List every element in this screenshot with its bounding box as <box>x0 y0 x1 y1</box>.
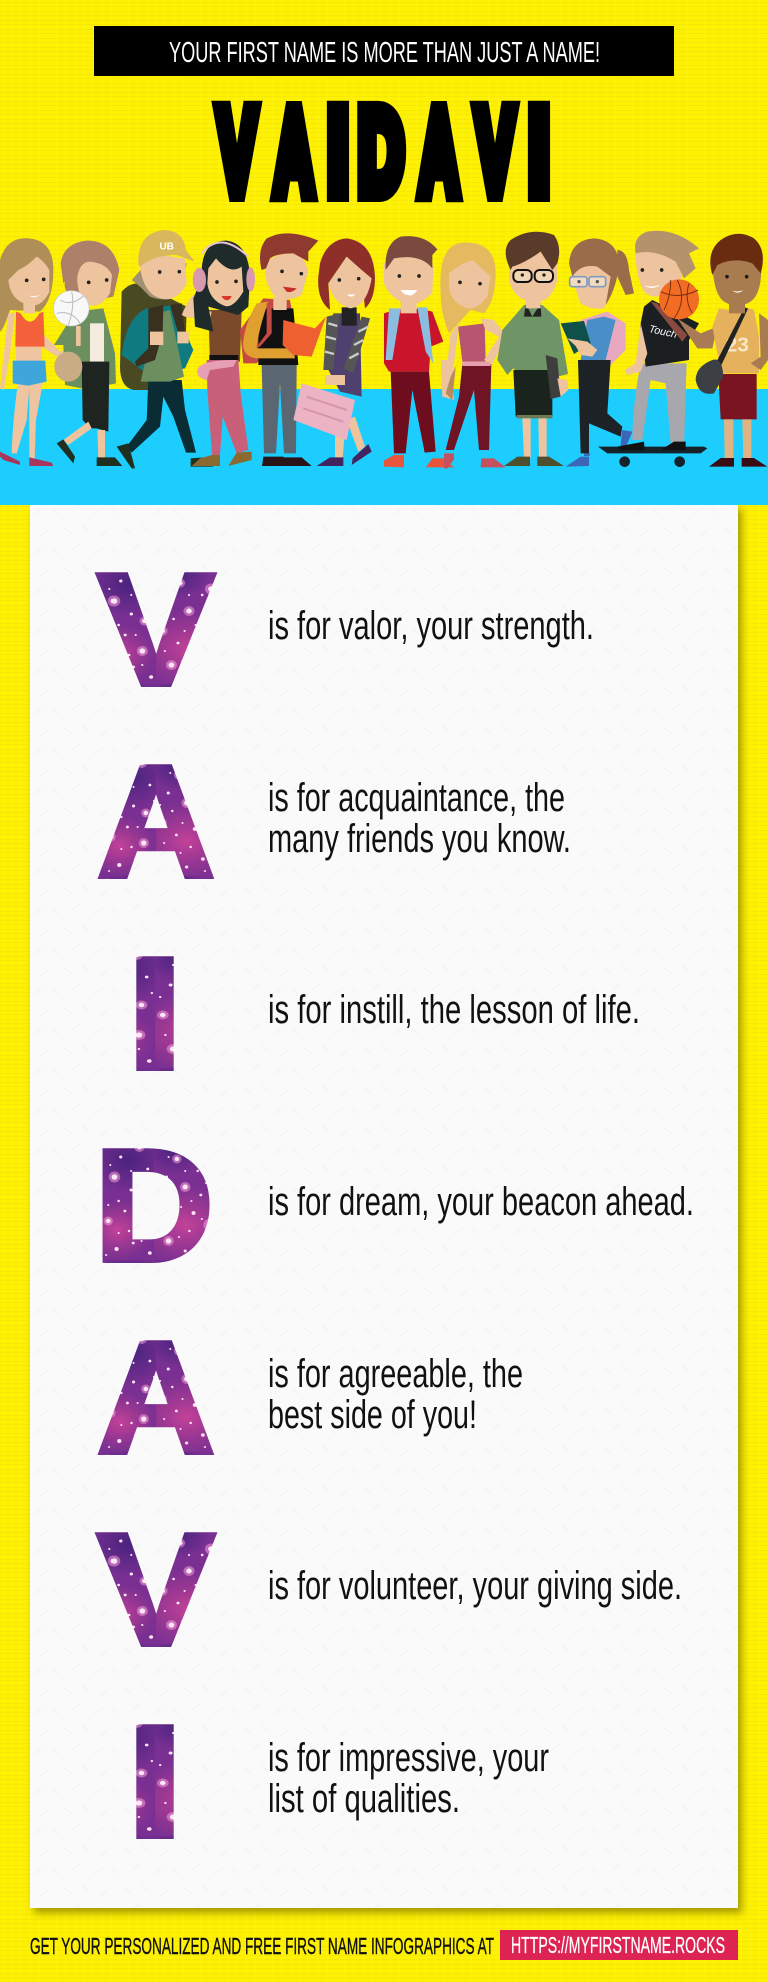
person 3: hiker with backpack <box>117 230 213 468</box>
row I: instill: I <box>126 925 184 1102</box>
row D: dream: D <box>95 1118 213 1294</box>
person 6: girl with pink bag <box>293 238 375 466</box>
row I: impressive: I <box>126 1693 184 1870</box>
row A: acquaintance: many friends you know. <box>268 817 571 861</box>
row D: dream <box>95 1118 694 1294</box>
title: name <box>218 85 549 218</box>
row A: agreeable: A <box>98 1309 214 1486</box>
row A: agreeable <box>98 1309 523 1486</box>
row I: impressive: is for impressive, your <box>268 1736 549 1780</box>
illustration: people left half <box>0 230 375 468</box>
row V: valor: is for valor, your strength. <box>268 604 594 648</box>
person 7: boy in red shirt <box>384 236 454 467</box>
person 12: boy in yellow tank <box>696 234 768 467</box>
row V: valor: V <box>98 542 214 718</box>
row A: acquaintance: A <box>98 733 214 910</box>
person 4: girl with headphones <box>182 241 255 466</box>
panel: name acrostic <box>30 505 738 1908</box>
cyan floor band <box>0 389 768 505</box>
title: name: V <box>218 85 256 217</box>
person 11: skater with basketball: Touch <box>648 323 678 341</box>
row A: agreeable: is for agreeable, the <box>268 1352 523 1396</box>
title: name: I <box>328 85 348 217</box>
title: name: I <box>529 85 549 217</box>
person 3: hiker with backpack: UB <box>159 241 174 252</box>
person 12: boy in yellow tank: 23 <box>726 334 749 357</box>
row V: valor <box>98 542 594 718</box>
title: name: V <box>476 85 514 217</box>
illustration: people right half <box>384 231 768 468</box>
title: name: D <box>358 87 404 218</box>
row A: acquaintance: is for acquaintance, the <box>268 776 565 820</box>
person 10: girl with tablet and ponytail <box>561 238 634 467</box>
row V: volunteer <box>98 1502 682 1678</box>
person 1: girl in orange top <box>0 238 80 466</box>
person 8: blonde girl <box>440 243 507 468</box>
row I: impressive: list of qualities. <box>268 1777 460 1821</box>
tagline banner <box>94 26 674 76</box>
person 11: skater with basketball <box>598 231 717 467</box>
row I: instill: is for instill, the lesson of life. <box>268 988 640 1032</box>
person 2: girl with volleyball <box>54 241 122 466</box>
title: name: A <box>274 87 314 218</box>
person 5: boy reading a book <box>240 233 326 466</box>
cyan band edge over shadow <box>0 499 768 505</box>
row A: acquaintance <box>98 733 571 910</box>
row V: volunteer: V <box>98 1502 214 1678</box>
person 9: boy with glasses <box>497 232 568 466</box>
row I: instill <box>126 925 640 1102</box>
panel shadow <box>34 509 742 1913</box>
row I: impressive <box>126 1693 549 1870</box>
row A: agreeable: best side of you! <box>268 1393 477 1437</box>
title: name: A <box>419 87 459 218</box>
